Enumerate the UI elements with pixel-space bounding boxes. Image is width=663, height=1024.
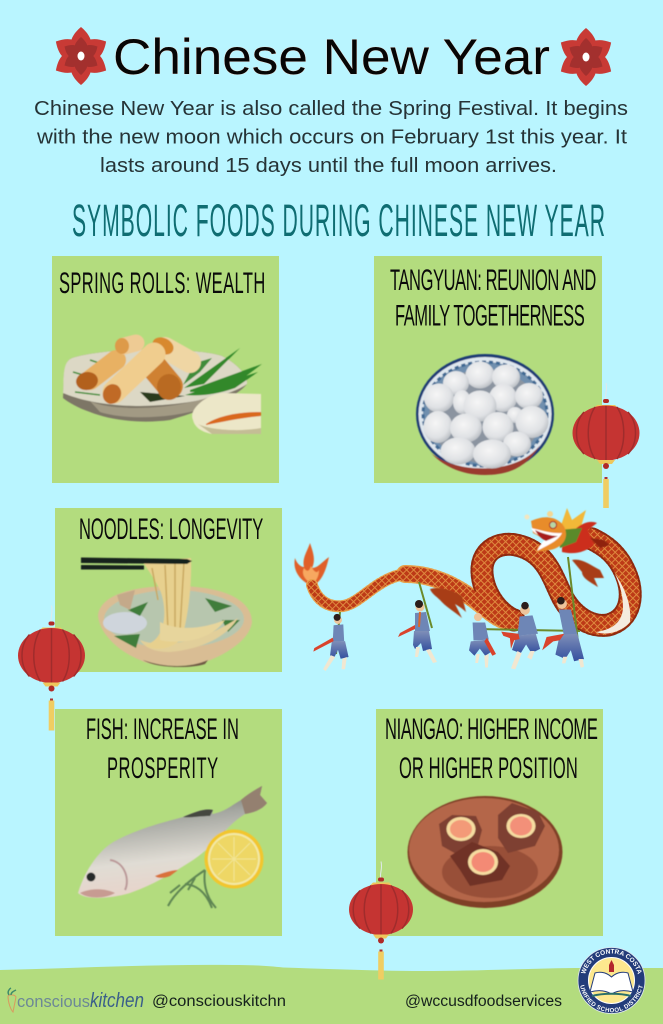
heading: tangyuan: FAMILY TOGETHERNESS (395, 299, 585, 333)
schoolhouse (609, 960, 614, 972)
heading: fish: FISH: INCREASE IN (86, 713, 239, 746)
lantern: lower (349, 862, 413, 980)
heading: tangyuan: TANGYUAN: REUNION AND (390, 264, 596, 297)
logo wordmark: conscious (17, 992, 90, 1011)
spring roll: bottom right (155, 368, 170, 386)
footer grass band (0, 965, 663, 1024)
heading: noodles: NOODLES: LONGEVITY (79, 513, 263, 546)
image: noodle bowl with chopsticks (81, 558, 252, 667)
dancer 4 (501, 602, 540, 669)
dancer 3 (469, 613, 496, 668)
intro paragraph: with the new moon which occurs on February 1st this year. It (36, 126, 627, 148)
title text: Chinese New Year (113, 29, 550, 85)
heading: niangao: OR HIGHER POSITION (399, 752, 578, 785)
image: niangao on wooden plate (408, 796, 562, 908)
panel: fish (55, 709, 282, 936)
dragon tail flame (294, 543, 329, 586)
logo wordmark: kitchen (90, 990, 144, 1012)
image: bowl of tangyuan (416, 354, 554, 475)
image: spring rolls on plate (63, 334, 262, 434)
footer logo: conscious kitchen (8, 988, 144, 1012)
dragon belly ribbon (596, 574, 630, 634)
panel: niangao (376, 709, 603, 936)
badge: West Contra Costa Unified School District (578, 947, 646, 1014)
lantern: left (18, 606, 85, 730)
heading: spring rolls: SPRING ROLLS: WEALTH (59, 267, 265, 300)
spring roll: left (90, 360, 116, 380)
spring roll: top right (165, 348, 190, 362)
heading: niangao (385, 713, 598, 785)
social handle: food services: @wccusdfoodservices (405, 993, 562, 1010)
heading: fish: PROSPERITY (107, 752, 218, 785)
title (51, 27, 616, 86)
intro paragraph (34, 97, 628, 177)
dragon body (312, 538, 630, 625)
intro paragraph: Chinese New Year is also called the Spring Festival. It begins (34, 97, 628, 120)
heading: fish (86, 713, 239, 785)
panel: noodles (55, 508, 282, 672)
heading: tangyuan (390, 264, 596, 333)
intro paragraph: lasts around 15 days until the full moon arrives. (100, 154, 557, 177)
dragon head (524, 508, 610, 553)
dragon dance illustration (294, 508, 630, 671)
icon: right red flower (556, 28, 616, 86)
panel: tangyuan (374, 256, 602, 483)
panel: spring rolls (52, 256, 279, 483)
social handle: conscious kitchen: @consciouskitchn (152, 993, 286, 1010)
icon: left red flower (51, 27, 111, 85)
icon: carrot (8, 988, 16, 1012)
spring roll: top left (124, 343, 136, 346)
badge: West Contra Costa Unified School District: WEST CONTRA COSTA (580, 948, 642, 974)
section heading: SYMBOLIC FOODS DURING CHINESE NEW YEAR (72, 196, 605, 246)
heading: niangao: NIANGAO: HIGHER INCOME (385, 713, 598, 746)
dancers' poles (336, 557, 580, 654)
dragon claws (430, 560, 604, 618)
image: fish with lemon and rosemary (78, 786, 267, 908)
open book (590, 972, 633, 994)
dancer 2 (398, 600, 437, 663)
dancer 5 (542, 597, 584, 668)
spring roll: main (114, 354, 154, 392)
dancer 1 (313, 614, 349, 671)
lantern: upper right (572, 383, 640, 508)
badge: West Contra Costa Unified School District: UNIFIED SCHOOL DISTRICT (580, 984, 643, 1012)
